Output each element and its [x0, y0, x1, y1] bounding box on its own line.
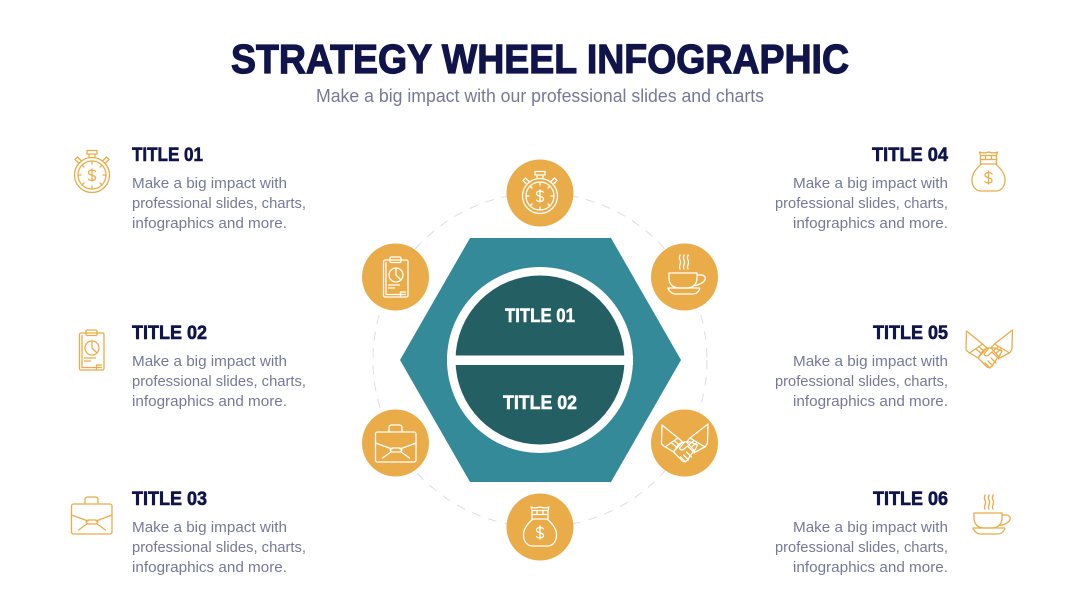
panel: title 05: professional slides, charts,	[775, 374, 948, 390]
node: briefcase	[362, 410, 429, 476]
icon: money bag	[972, 152, 1005, 191]
icon: stopwatch	[74, 150, 110, 192]
panel: title 02: infographics and more.	[132, 394, 287, 410]
panel: title 06: Make a big impact with	[793, 520, 948, 536]
icon: handshake	[966, 330, 1012, 368]
panel: title 02	[80, 322, 306, 410]
panel: title 02: TITLE 02	[132, 322, 207, 344]
panel: title 04: professional slides, charts,	[775, 196, 948, 212]
panel: title 01: TITLE 01	[132, 144, 203, 166]
panel: title 01	[74, 144, 306, 232]
node: handshake	[651, 410, 718, 476]
panel: title 06: TITLE 06	[873, 488, 948, 510]
panel: title 05	[775, 322, 1012, 410]
panel: title 01: Make a big impact with	[132, 176, 287, 192]
central wheel	[447, 267, 633, 453]
wheel label 02: TITLE 02	[503, 392, 577, 414]
panel: title 06: infographics and more.	[793, 560, 948, 576]
dashed orbit ring	[373, 193, 707, 527]
title: STRATEGY WHEEL INFOGRAPHIC	[231, 36, 849, 82]
subtitle: Make a big impact with our professional slides and charts	[316, 86, 764, 106]
panel: title 01: infographics and more.	[132, 216, 287, 232]
panel: title 02: Make a big impact with	[132, 354, 287, 370]
icon: coffee cup	[973, 495, 1010, 534]
panel: title 01: professional slides, charts,	[132, 196, 306, 212]
panel: title 04: Make a big impact with	[793, 176, 948, 192]
panel: title 06: professional slides, charts,	[775, 540, 948, 556]
icon: briefcase	[72, 497, 112, 534]
panel: title 04: TITLE 04	[872, 144, 948, 166]
panel: title 05: Make a big impact with	[793, 354, 948, 370]
wheel label 01: TITLE 01	[505, 305, 575, 327]
panel: title 05: TITLE 05	[873, 322, 948, 344]
panel: title 03: infographics and more.	[132, 560, 287, 576]
panel: title 03: TITLE 03	[132, 488, 207, 510]
node: money bag	[506, 494, 574, 560]
icon: clipboard	[80, 330, 104, 370]
panel: title 03: Make a big impact with	[132, 520, 287, 536]
node: coffee cup	[651, 244, 718, 310]
panel: title 05: infographics and more.	[793, 394, 948, 410]
panel: title 06	[775, 488, 1010, 576]
panel: title 03	[72, 488, 306, 576]
node: clipboard	[362, 244, 429, 310]
central hexagon	[400, 238, 681, 482]
node: stopwatch	[506, 160, 574, 226]
panel: title 03: professional slides, charts,	[132, 540, 306, 556]
panel: title 04: infographics and more.	[793, 216, 948, 232]
panel: title 02: professional slides, charts,	[132, 374, 306, 390]
panel: title 04	[775, 144, 1005, 232]
